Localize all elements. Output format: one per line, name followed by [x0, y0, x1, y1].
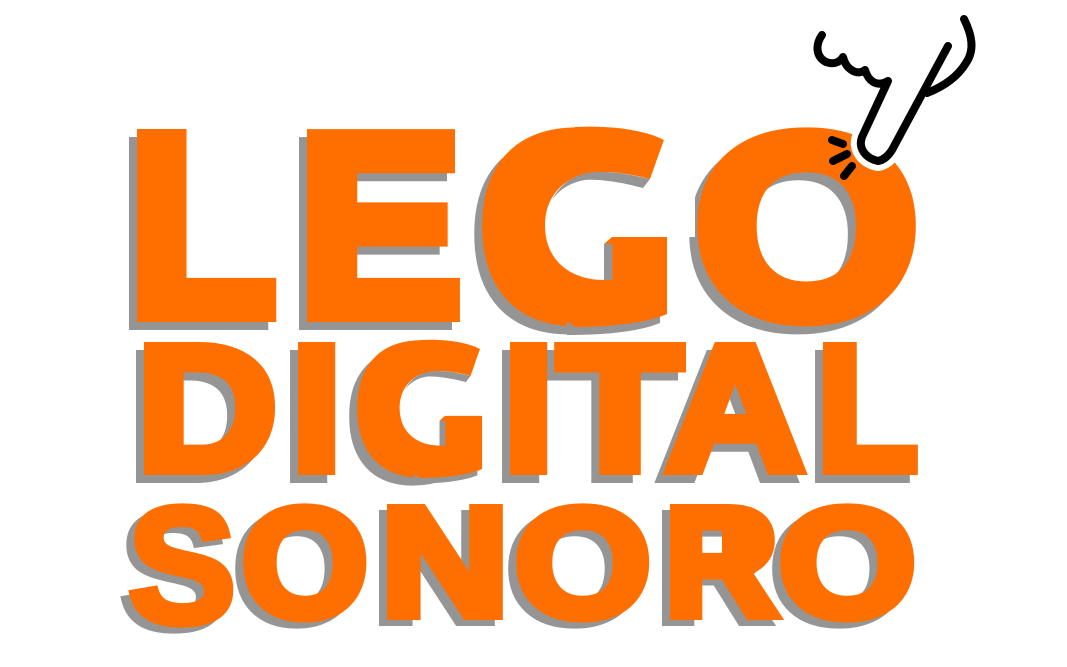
icon: hand pressing finger: [817, 19, 972, 176]
title word: DIGITAL: I: [503, 310, 554, 508]
title word: DIGITAL: A: [666, 309, 805, 508]
title word: DIGITAL: I: [291, 310, 342, 508]
title word: LEGO: L: [128, 82, 276, 370]
title word: SONORO: O: [778, 477, 916, 650]
title word: DIGITAL: D: [137, 309, 277, 508]
title word: SONORO: O: [241, 476, 368, 650]
title word: DIGITAL: L: [817, 310, 918, 508]
letter G shape refinement, second row: [383, 340, 501, 484]
letter G shape refinement, first row: [520, 127, 695, 335]
title word: DIGITAL: G: [355, 309, 487, 509]
title word: LEGO: E: [298, 82, 462, 370]
letter R counter refinement: [722, 530, 742, 560]
title word: LEGO: G: [480, 82, 674, 371]
title word: SONORO: R: [664, 476, 779, 649]
title word: SONORO: [128, 472, 916, 658]
title word: LEGO: [128, 82, 919, 372]
title word: DIGITAL: T: [558, 310, 682, 508]
title word: DIGITAL: [137, 309, 918, 509]
title word: SONORO: N: [380, 475, 510, 649]
title word: SONORO: O: [514, 477, 651, 650]
title word: SONORO: S: [128, 472, 236, 658]
title word: LEGO: O: [694, 82, 919, 372]
